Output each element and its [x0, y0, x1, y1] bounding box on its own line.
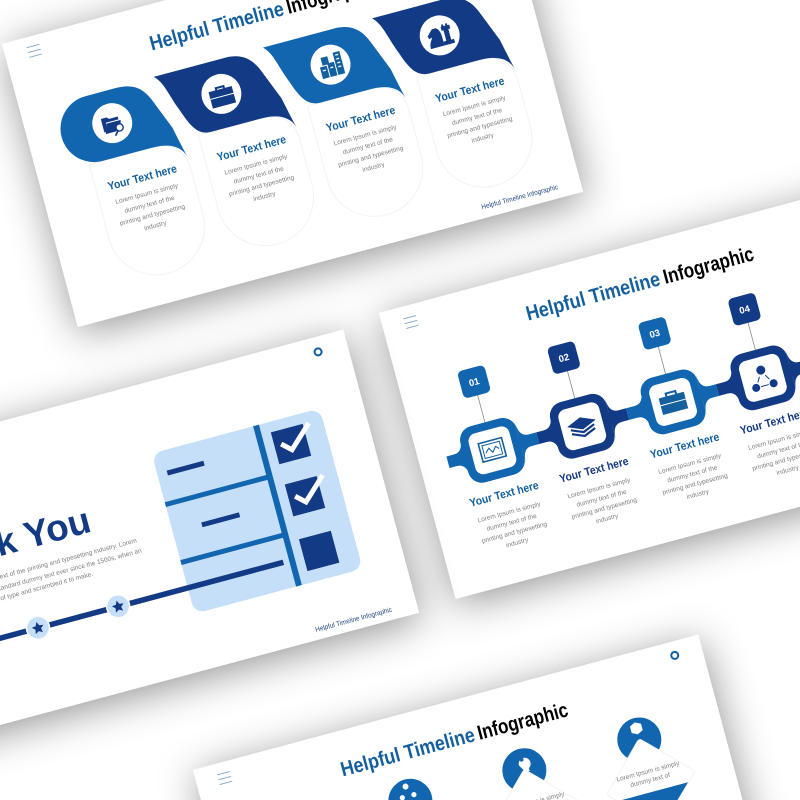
- step 3 text: printing and typesetting: [662, 472, 729, 497]
- step 3 text: printing and typesetting: [337, 145, 405, 169]
- slide: top, leaf-shaped timeline: [2, 0, 583, 327]
- title: [147, 0, 380, 55]
- icon: box: [629, 721, 644, 736]
- step 1 text: printing and typesetting: [481, 521, 548, 545]
- icon: people network: [747, 362, 779, 393]
- icon: briefcase: [658, 388, 688, 415]
- card 2: [474, 737, 592, 800]
- step 3 text: industry: [362, 161, 386, 174]
- step 1 text: [107, 163, 191, 239]
- timeline with stars: [0, 551, 286, 662]
- step 2 text: [558, 456, 642, 532]
- step 4 text: Lorem Ipsum is simply: [442, 94, 507, 118]
- ring marker: [670, 651, 679, 660]
- checkbox 3: [299, 531, 339, 571]
- title: Infographic: [661, 242, 756, 289]
- step 1 text: industry: [505, 537, 530, 549]
- step 1 text: Lorem Ipsum is simply: [115, 182, 180, 206]
- step 3 node: [606, 308, 725, 442]
- step 2 text: printing and typesetting: [571, 497, 638, 521]
- step 3 text: Your Text here: [649, 431, 721, 461]
- checkbox 2: [285, 474, 331, 516]
- icon: network: [396, 781, 417, 800]
- step 3 text: Lorem Ipsum is simply: [333, 124, 398, 147]
- step 2 text: dummy text of the: [576, 489, 628, 509]
- step 2 text: printing and typesetting: [228, 174, 295, 198]
- step 3 text: Lorem Ipsum is simply: [658, 452, 723, 476]
- step 2 node: 02: [558, 352, 571, 365]
- card 1: [360, 768, 478, 800]
- step 2 text: Lorem Ipsum is simply: [567, 477, 632, 500]
- star marker 1: [24, 614, 52, 642]
- footer label: Helpful Timeline Infographic: [315, 607, 393, 634]
- step 1 text: Your Text here: [468, 480, 540, 510]
- step 1 text: dummy text of the: [124, 195, 176, 215]
- checkbox 1: [271, 422, 317, 464]
- card 3: dummy text of: [630, 772, 671, 789]
- checklist panel: [152, 408, 363, 614]
- step 1 text: industry: [143, 219, 168, 232]
- step 3 text: Your Text here: [325, 105, 397, 135]
- step 4 node: 04: [738, 303, 752, 317]
- slide: numbered rounded-square timeline: [379, 173, 800, 599]
- step 1 node: [426, 356, 545, 490]
- card 3: Lorem Ipsum is simply: [616, 760, 681, 784]
- step 1 node: 01: [468, 376, 482, 389]
- menu icon: [217, 772, 232, 785]
- step 1 text: printing and typesetting: [119, 203, 186, 227]
- icon: chess pieces: [426, 22, 455, 49]
- step 2 text: industry: [253, 190, 277, 203]
- panel: step 1: [53, 75, 215, 291]
- step 2 text: dummy text of the: [233, 165, 285, 186]
- step 4 text: [434, 75, 518, 151]
- step 4 node: [695, 274, 800, 418]
- star marker 2: [104, 592, 132, 620]
- step 4 text: industry: [776, 464, 800, 477]
- icon: chart board: [478, 438, 506, 462]
- step 2 text: [216, 134, 300, 209]
- step 3 text: dummy text of the: [342, 136, 394, 156]
- icon: stack of books: [569, 415, 596, 439]
- step 2 text: industry: [595, 512, 620, 525]
- footer label: Helpful Timeline Infographic: [481, 184, 559, 211]
- step 2 node: [516, 332, 635, 466]
- step 4 text: printing and typesetting: [447, 115, 514, 140]
- step 3 text: [325, 105, 409, 180]
- step 3 node: 03: [648, 328, 661, 341]
- card 3: [589, 706, 707, 800]
- step 2 text: Lorem Ipsum is simply: [224, 153, 289, 177]
- icon: briefcase: [208, 83, 236, 109]
- slide: thank you with checklist: [0, 330, 419, 748]
- step 1 text: [468, 480, 552, 556]
- icon: buildings: [317, 51, 345, 79]
- title: Helpful Timeline: [523, 268, 663, 326]
- panel: step 4: [372, 0, 543, 205]
- title: Infographic: [475, 698, 571, 745]
- step 4 text: dummy text of the: [451, 107, 503, 127]
- panel: step 2: [154, 45, 324, 264]
- step 3 text: [649, 431, 733, 507]
- ring marker: [314, 348, 322, 356]
- step 3 text: dummy text of the: [667, 464, 719, 484]
- panel: step 3: [263, 15, 434, 235]
- step 3 text: industry: [686, 488, 711, 501]
- step 2 text: Your Text here: [216, 134, 288, 164]
- step 1 text: dummy text of the: [486, 513, 538, 533]
- title: [338, 698, 571, 781]
- menu icon: [27, 44, 42, 57]
- title: [523, 242, 756, 326]
- icon: folder with magnifier: [101, 114, 125, 138]
- step 1 text: Your Text here: [107, 163, 178, 193]
- step 4 text: Your Text here: [434, 75, 506, 105]
- slide: bottom, diamond cards: [193, 635, 774, 800]
- title: Helpful Timeline: [338, 723, 477, 781]
- icon: head with bulb: [517, 756, 533, 773]
- step 4 text: [739, 407, 800, 483]
- menu icon: [403, 316, 419, 329]
- step 2 text: Your Text here: [558, 456, 630, 486]
- step 4 text: industry: [471, 132, 495, 145]
- step 1 text: Lorem Ipsum is simply: [477, 501, 542, 524]
